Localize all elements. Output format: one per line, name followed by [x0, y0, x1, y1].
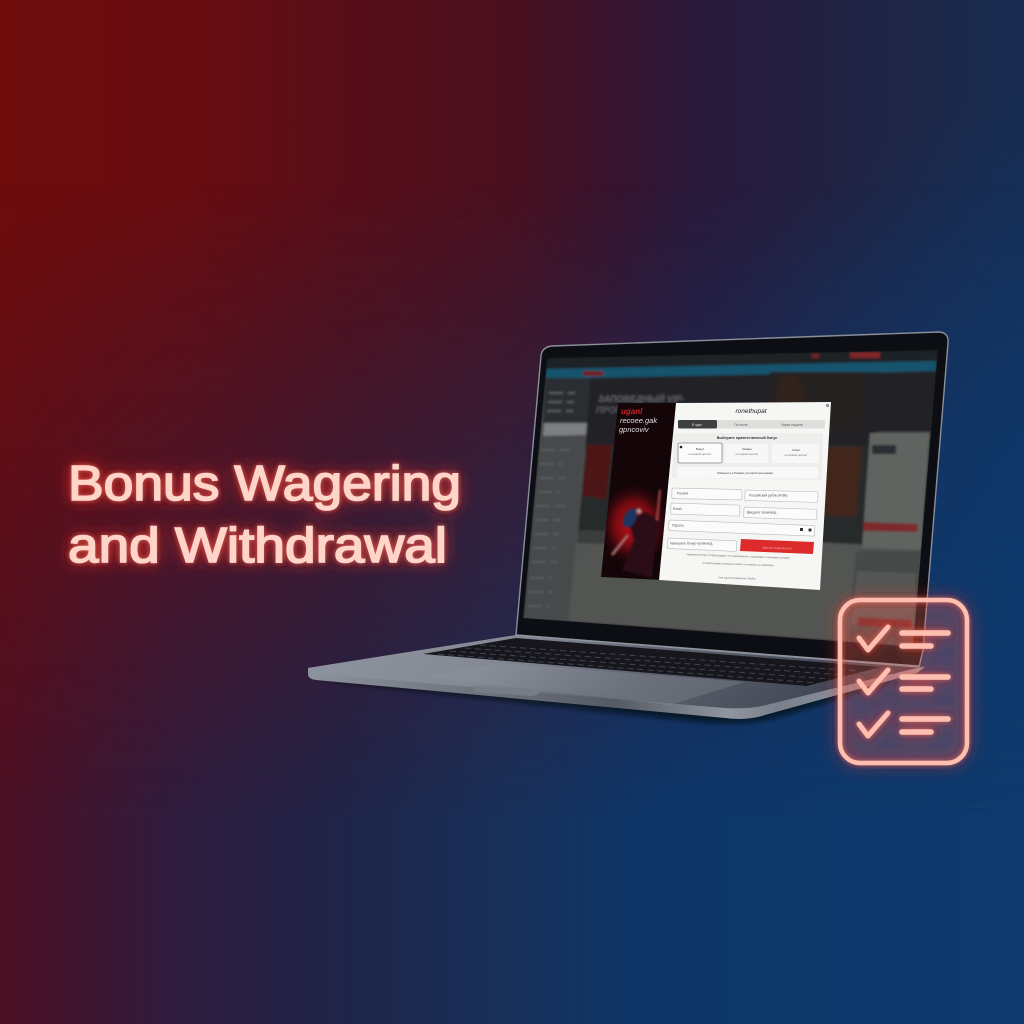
submit label: зарегистрироваться: [762, 545, 792, 551]
legal text: и подтверждаю совершеннолетие и согласие на обработку: [702, 561, 774, 567]
bonus selection panel: Казино: [742, 447, 752, 451]
form labels: Пароль: [672, 524, 684, 528]
bonus selection panel: Спорт: [792, 448, 801, 452]
laptop ground shadow: [315, 680, 900, 723]
rider silhouette: [612, 490, 662, 578]
password icons: [800, 528, 812, 532]
submit button: [740, 539, 814, 554]
bonus selection panel: Выберите приветственный бонус: [717, 436, 777, 440]
lower content: [568, 620, 694, 630]
front notch: [472, 686, 540, 696]
laptop screen: [523, 350, 938, 647]
close button: [826, 404, 829, 407]
poster: gpncoviv: [619, 425, 650, 434]
keyboard: [423, 638, 881, 686]
right column: [876, 370, 936, 433]
form labels: Российский рубль (RUB): [749, 494, 788, 498]
checklist icon: [840, 600, 967, 763]
bonus selection panel: Обменять в Рамках условий программы: [717, 471, 773, 475]
red header buttons: [812, 352, 880, 358]
top bar: [546, 350, 938, 369]
tabs: В один: [692, 423, 702, 427]
hinge highlight: [516, 635, 919, 666]
form labels: [670, 492, 788, 546]
laptop: [308, 332, 948, 723]
poster: [598, 403, 678, 580]
form labels: Россия: [677, 492, 688, 496]
modal card: [659, 402, 831, 590]
tabs: [678, 420, 825, 428]
form labels: Напишите бонус-промокод: [670, 542, 712, 546]
bonus selection panel: Бонус: [696, 447, 705, 451]
form fields: [668, 488, 818, 551]
form labels: Email: [673, 507, 682, 511]
modal heading: ronethupat: [735, 408, 768, 415]
bonus selection panel: на первый депозит: [785, 453, 808, 457]
title: and Withdrawal: [68, 519, 447, 573]
poster: recoee.gak: [620, 416, 658, 425]
screen base: [568, 370, 936, 646]
legal text: [687, 552, 790, 581]
tabs: Через соцсети: [781, 423, 803, 427]
trackpad: [423, 663, 745, 705]
bonus selection panel: на первый депозит: [689, 452, 712, 456]
laptop base: [308, 635, 925, 719]
poster: uganl: [621, 407, 643, 416]
modal contents: [668, 404, 829, 581]
legal text: Нажимая кнопку, я подтверждаю, что ознакомился с правилами и принимаю условия: [687, 552, 790, 560]
laptop screen: ЗАПОВЕДНЫЙ VIP-: [598, 393, 685, 404]
bonus selection panel: [672, 433, 823, 480]
laptop screen: ПРОГРАММА: [596, 405, 654, 415]
title: [68, 457, 461, 573]
game cards row: [578, 445, 880, 545]
legal text: Уже зарегистрированы? Войти: [718, 575, 756, 581]
checklist tint: [840, 600, 967, 763]
title: Bonus Wagering: [68, 457, 461, 511]
nav bar: [545, 361, 937, 380]
form labels: Введите промокод: [747, 510, 776, 514]
laptop lid: [516, 332, 948, 667]
tabs: По почте: [734, 423, 748, 427]
hero banner: [585, 372, 880, 450]
bonus selection panel: на первый депозит: [736, 452, 759, 456]
registration modal: [598, 402, 831, 590]
left sidebar: [523, 617, 566, 621]
